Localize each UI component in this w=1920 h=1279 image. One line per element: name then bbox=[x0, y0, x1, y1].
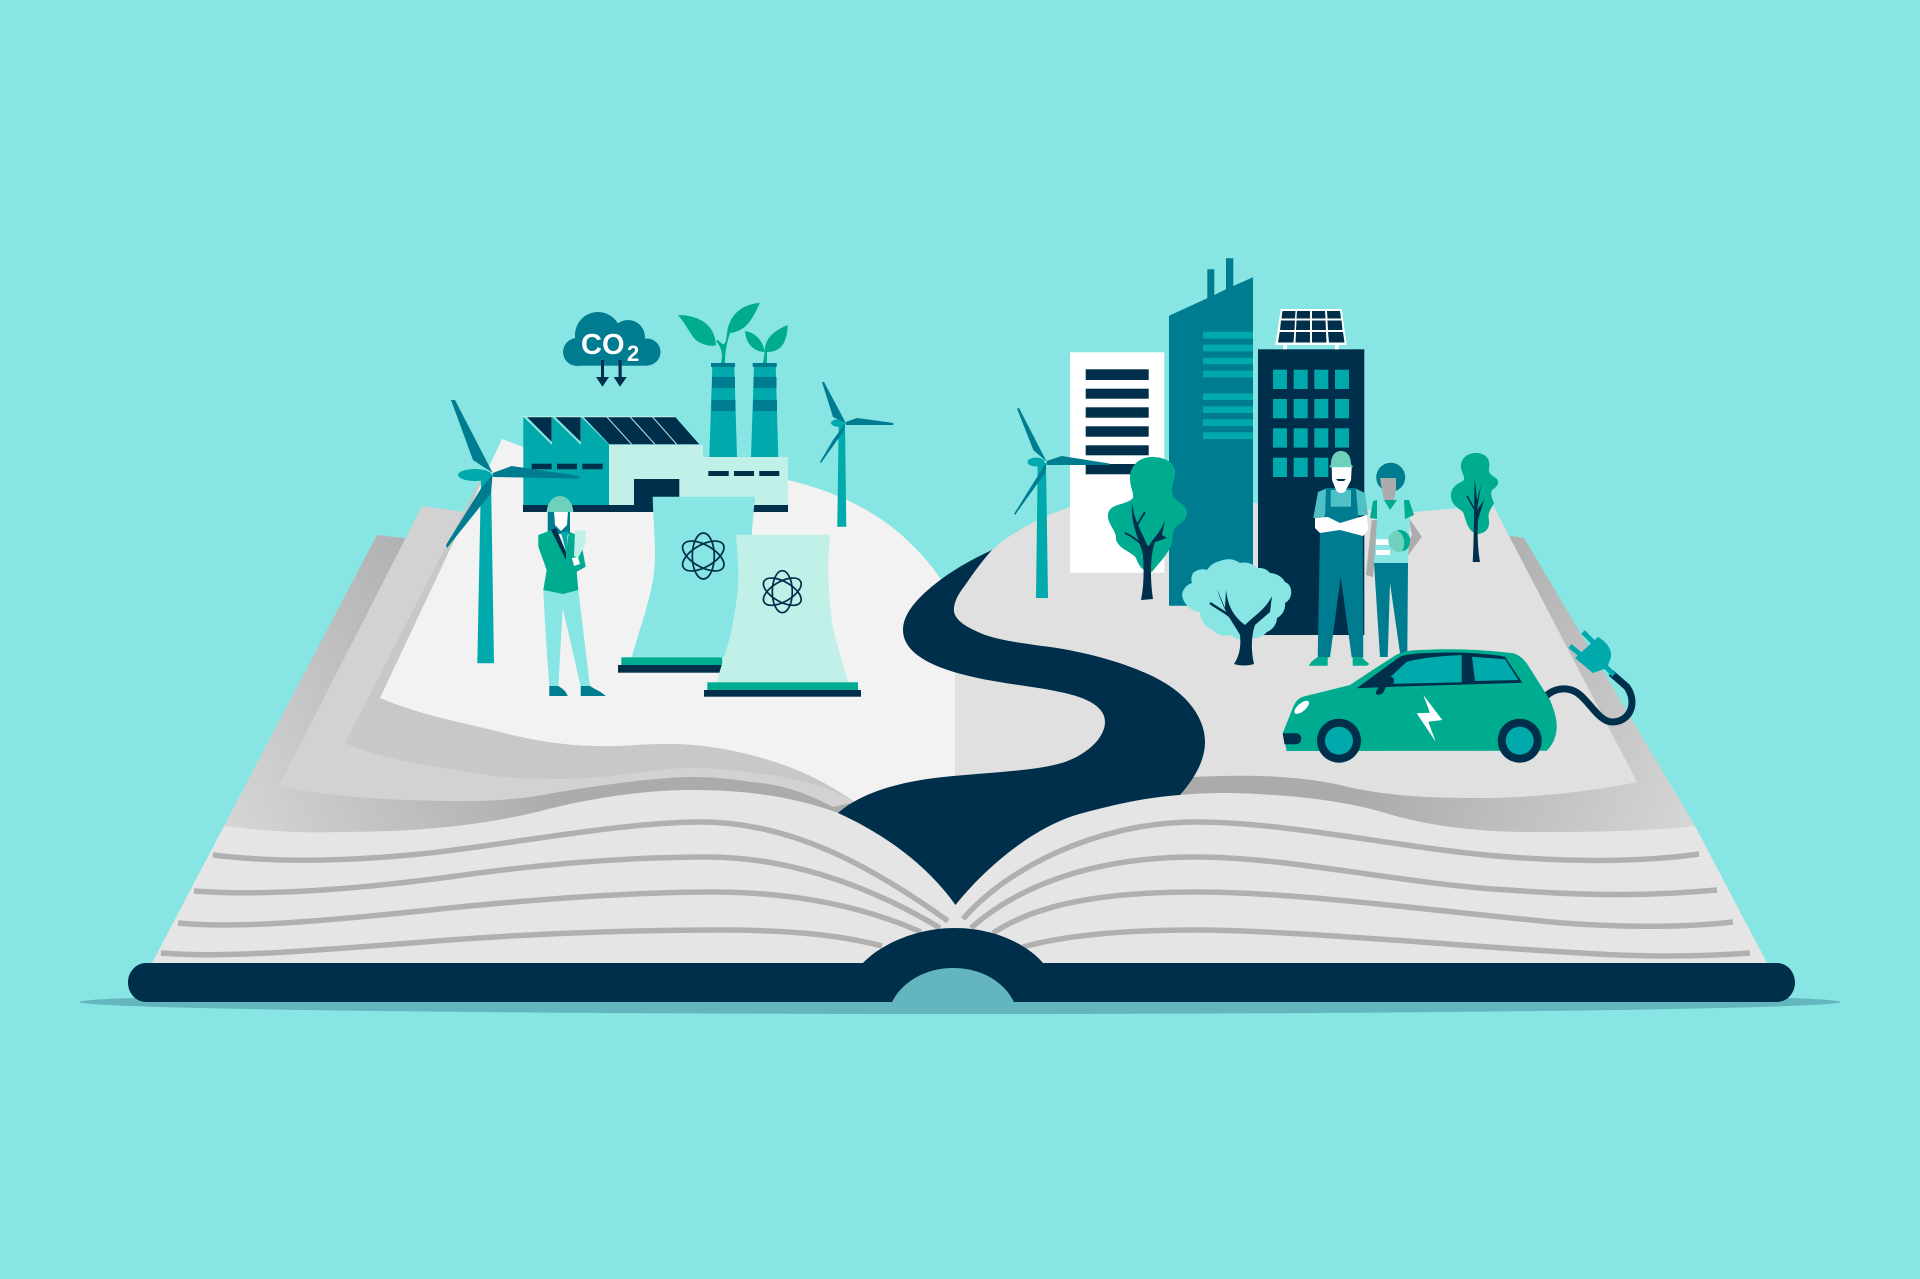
road winding into the book bbox=[838, 550, 1205, 930]
book: back page layers bbox=[224, 480, 1695, 860]
rooftop solar panel bbox=[1275, 309, 1347, 349]
factory windows bbox=[532, 464, 779, 476]
worker man with overalls bbox=[1309, 451, 1369, 666]
tree: green by white building bbox=[1108, 457, 1187, 600]
car windows bbox=[1357, 653, 1522, 688]
factory door and base bbox=[523, 479, 788, 512]
factory light section bbox=[609, 445, 788, 505]
wind turbine: right of road bbox=[1014, 408, 1109, 598]
tree: green small right bbox=[1451, 453, 1498, 562]
lightning bolt bbox=[1417, 695, 1442, 742]
right page bbox=[955, 503, 1637, 820]
cloud with CO2 label bbox=[563, 312, 660, 387]
worker woman with vest and helmet bbox=[1366, 463, 1422, 657]
cable bbox=[1545, 673, 1632, 722]
buildings bbox=[1070, 258, 1364, 635]
plants growing from chimneys bbox=[678, 303, 788, 363]
left page bbox=[380, 439, 955, 830]
navy tower with windows bbox=[1258, 349, 1364, 635]
tree: light bushy tree bbox=[1182, 559, 1291, 666]
ground shadow bbox=[80, 990, 1840, 1014]
factory bbox=[523, 303, 788, 512]
chimney: left bbox=[709, 363, 737, 457]
electric car bbox=[1283, 632, 1632, 763]
car mirror bbox=[1376, 677, 1394, 695]
book: lower page block with stripes bbox=[152, 790, 1767, 963]
cooling tower: rear with atom symbol bbox=[618, 497, 755, 673]
car body bbox=[1283, 649, 1557, 751]
plug bbox=[1570, 632, 1614, 675]
engineer woman with helmet and plans bbox=[538, 496, 606, 696]
factory sawtooth section bbox=[523, 417, 609, 505]
CO2 subscript: 2 bbox=[627, 341, 639, 366]
teal tower bbox=[1169, 258, 1253, 606]
CO2 text: CO bbox=[581, 329, 624, 361]
downward arrows bbox=[596, 360, 627, 387]
wheels bbox=[1317, 719, 1542, 763]
wind turbine: large left bbox=[446, 400, 579, 663]
cooling tower: front with atom symbol bbox=[704, 535, 861, 697]
chimney: right bbox=[751, 363, 778, 457]
headlight bbox=[1292, 698, 1311, 716]
grille bbox=[1283, 733, 1301, 744]
wind turbine: small behind factory bbox=[820, 382, 893, 527]
book spine and cover base bbox=[128, 928, 1795, 1002]
roof solar panels bbox=[523, 417, 699, 444]
white office building bbox=[1070, 352, 1164, 573]
